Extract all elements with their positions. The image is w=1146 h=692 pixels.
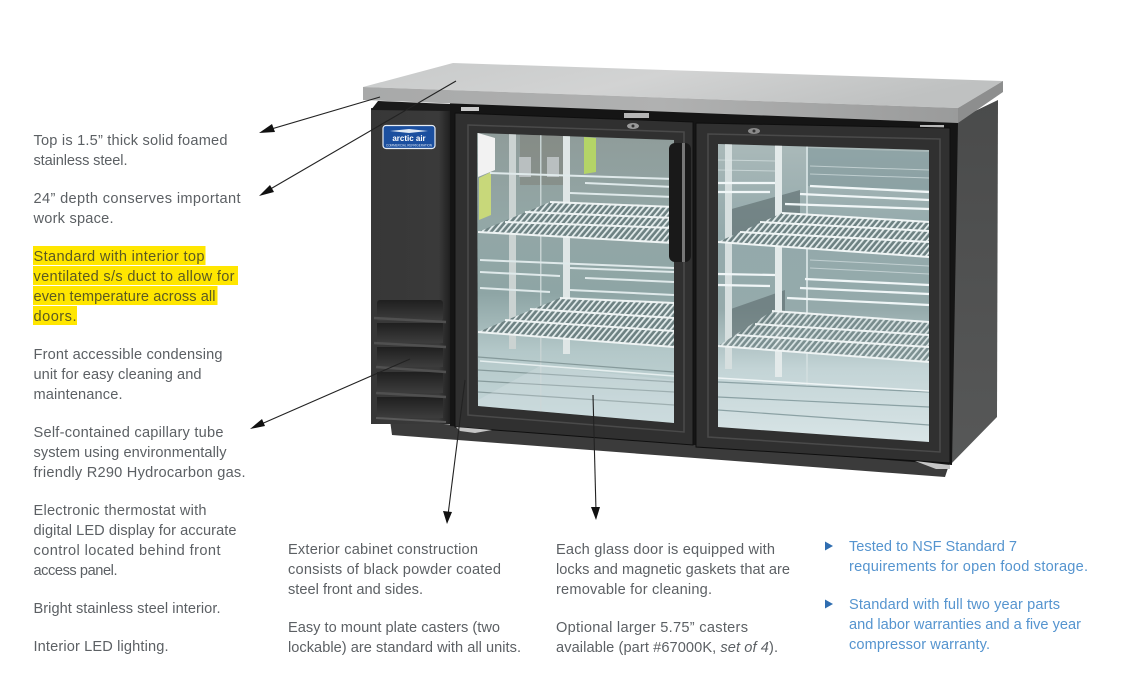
text: thermostat: Electronic thermostat with bbox=[34, 503, 206, 519]
text: depth feature bbox=[32, 191, 240, 227]
highlighted text: ventilated duct: even temperature across all bbox=[34, 289, 216, 305]
arrow: glass door bbox=[591, 395, 600, 520]
text: thermostat: access panel. bbox=[34, 563, 118, 579]
text: thermostat bbox=[34, 503, 236, 579]
text: optional casters: Optional larger 5.75” casters bbox=[556, 620, 748, 636]
text: capillary tube: system using environmentally bbox=[34, 445, 227, 461]
text: exterior cabinet: Exterior cabinet construction bbox=[288, 542, 478, 558]
text: exterior cabinet bbox=[288, 542, 501, 598]
text: top feature: stainless steel. bbox=[34, 153, 128, 169]
arrow: condensing unit bbox=[250, 359, 410, 429]
text: capillary tube: Self-contained capillary tube bbox=[34, 425, 224, 441]
plate hinges bbox=[456, 427, 950, 469]
product photo: refrigerator bbox=[363, 63, 1003, 477]
door handle bbox=[669, 143, 691, 262]
logo badge bbox=[383, 126, 435, 148]
door locks bbox=[627, 123, 760, 134]
text: glass door: locks and magnetic gaskets that are bbox=[556, 562, 790, 578]
text: casters: lockable) are standard with all units. bbox=[288, 640, 521, 656]
left glass with shelves bbox=[477, 133, 675, 425]
text: exterior cabinet: consists of black powder coated bbox=[288, 562, 501, 578]
text: condensing unit: unit for easy cleaning and bbox=[34, 367, 202, 383]
text: thermostat: digital LED display for accurate bbox=[34, 523, 236, 539]
vent grille bbox=[374, 300, 446, 422]
right glass with shelves bbox=[718, 144, 930, 444]
text: top feature: Top is 1.5” thick solid foamed bbox=[34, 133, 228, 149]
text: lighting: Interior LED lighting. bbox=[34, 639, 168, 655]
text: glass door: Each glass door is equipped with bbox=[556, 542, 775, 558]
text: glass door: removable for cleaning. bbox=[556, 582, 712, 598]
bullet: warranty: compressor warranty. bbox=[849, 637, 990, 653]
logo badge: COMMERCIAL REFRIGERATION bbox=[386, 142, 432, 148]
text: glass door bbox=[556, 542, 790, 598]
text: condensing unit bbox=[34, 347, 222, 403]
arrow: depth bbox=[259, 81, 456, 196]
bullet: warranty: Standard with full two year parts bbox=[849, 597, 1060, 613]
bullet: NSF standard: Tested to NSF Standard 7 bbox=[849, 539, 1017, 555]
text: capillary tube: friendly R290 Hydrocarbon gas. bbox=[34, 465, 246, 481]
bullet: NSF standard: requirements for open food storage. bbox=[849, 559, 1088, 575]
left compressor panel bbox=[371, 108, 451, 424]
text: interior: Bright stainless steel interior. bbox=[34, 601, 220, 617]
highlighted text: ventilated duct: doors. bbox=[34, 309, 76, 325]
text: capillary tube bbox=[34, 425, 246, 481]
text: casters bbox=[288, 620, 521, 656]
text: casters: Easy to mount plate casters (two bbox=[288, 620, 500, 636]
highlighted text: ventilated duct bbox=[33, 246, 238, 325]
arrow: countertop thickness bbox=[259, 97, 380, 133]
base plinth bbox=[390, 420, 950, 477]
countertop bbox=[363, 63, 1003, 129]
arrow: cabinet bbox=[443, 380, 465, 524]
left door frame bbox=[455, 113, 693, 445]
text: exterior cabinet: steel front and sides. bbox=[288, 582, 423, 598]
text: depth feature: 24” depth conserves important bbox=[34, 191, 240, 207]
text: top feature bbox=[34, 133, 228, 169]
text: optional casters bbox=[556, 620, 778, 656]
right door frame bbox=[696, 123, 950, 463]
text: thermostat: control located behind front bbox=[34, 543, 220, 559]
highlighted text: ventilated duct: ventilated s/s duct to allow for bbox=[34, 269, 235, 285]
text: condensing unit: maintenance. bbox=[34, 387, 122, 403]
text: condensing unit: Front accessible condensing bbox=[34, 347, 222, 363]
highlighted text: ventilated duct: Standard with interior top bbox=[34, 249, 204, 265]
bullet: NSF standard bbox=[825, 539, 1088, 575]
logo badge: arctic air bbox=[392, 134, 426, 143]
text: optional casters: available (part #67000K, set of 4). bbox=[556, 640, 778, 656]
right side panel bbox=[950, 100, 998, 465]
bullet: warranty bbox=[825, 597, 1081, 653]
bullet: warranty: and labor warranties and a five year bbox=[849, 617, 1081, 633]
text: depth feature: work space. bbox=[32, 211, 114, 227]
